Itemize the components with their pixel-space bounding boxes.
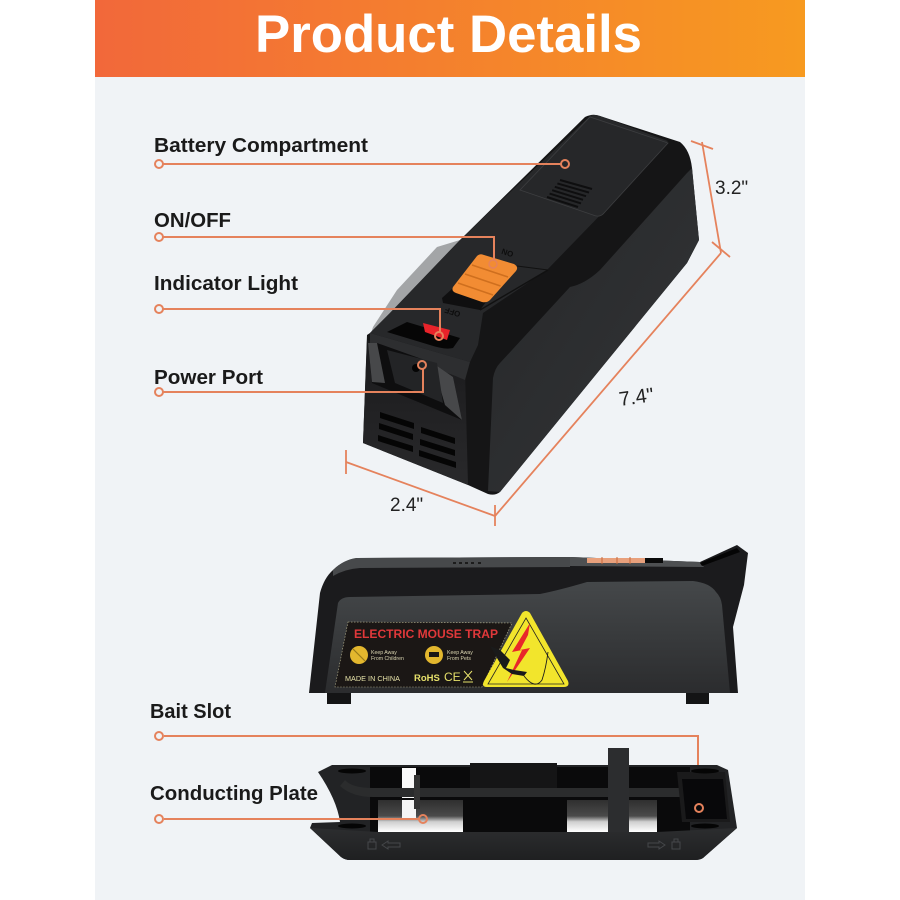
cross rail: [340, 780, 693, 797]
icon: right lock and arrow: [648, 839, 680, 849]
front recess: [368, 343, 462, 420]
lightning bolt: [507, 623, 530, 682]
rear hood: [700, 548, 740, 566]
indicator window: [387, 322, 460, 349]
background panel: [95, 0, 805, 900]
callout: Power Port: [154, 361, 426, 396]
warning triangle: [483, 611, 568, 687]
warning label: [335, 622, 512, 687]
bait slot marker: [695, 804, 703, 812]
left edge highlight: [367, 240, 460, 345]
product: trap tray view: [310, 748, 737, 860]
mouse silhouette: [490, 646, 527, 676]
tray front wall: [310, 828, 737, 860]
hood rim: [370, 333, 470, 380]
side panel: [325, 581, 730, 693]
children warning: Keep Away: [371, 650, 397, 656]
power port: [412, 364, 420, 372]
warning label: From Pets: [447, 656, 471, 662]
label: 3.2 in: 3.2": [715, 178, 748, 199]
front face: [363, 340, 468, 485]
callout: ON/OFF: ON/OFF: [154, 209, 231, 232]
header banner: [95, 0, 805, 77]
callout: Conducting Plate: Conducting Plate: [150, 782, 318, 805]
icon: keep away from children: [350, 646, 368, 664]
label heading: ELECTRIC MOUSE TRAP: [354, 629, 498, 641]
crossbar post: [608, 748, 629, 832]
bait compartment: [677, 772, 730, 822]
metal plate left: [378, 800, 463, 832]
recess pillars: [368, 343, 462, 420]
indicator light: [423, 323, 450, 340]
dimension: width 2.4 in: [346, 450, 495, 516]
warning label: CE: [444, 670, 461, 684]
front vents: [378, 412, 456, 468]
icon: left lock and arrow: [368, 839, 400, 849]
label: 7.4 in: 7.4": [618, 384, 655, 411]
metal plate upper: [402, 768, 416, 798]
certification marks: RoHS: [414, 673, 440, 684]
callout: Battery Compartment: [154, 134, 569, 168]
product: trap side view: [309, 545, 748, 704]
icon: recycling mark: [463, 671, 473, 682]
center block: [470, 763, 557, 788]
tray outline: [310, 748, 737, 860]
top surface: [370, 115, 668, 362]
callout: Indicator Light: Indicator Light: [154, 272, 298, 295]
on/off switch: [452, 254, 517, 302]
callout: Indicator Light: [154, 272, 443, 340]
switch strip orange: [587, 557, 663, 564]
lid dots: [453, 562, 481, 564]
title: Product Details: [255, 5, 642, 64]
icon: keep away from pets: [425, 646, 443, 664]
side face: [488, 168, 699, 492]
corner keyholes: [338, 768, 719, 828]
callout: Battery Compartment: Battery Compartment: [154, 134, 368, 157]
pets warning: Keep Away: [447, 650, 473, 656]
callout: Bait Slot: Bait Slot: [150, 700, 231, 723]
callout: ON/OFF: [154, 209, 497, 268]
recess block: [387, 350, 443, 403]
body silhouette: [363, 115, 699, 495]
battery cover grille: [547, 180, 592, 207]
warning label: From Children: [371, 656, 404, 662]
feet: [327, 693, 351, 704]
product: trap perspective view: [363, 115, 699, 495]
dimension: length 7.4 in: [495, 253, 721, 526]
tray interior: [370, 767, 690, 832]
on and off marks: ON: [500, 246, 515, 259]
side body: [309, 545, 748, 693]
dimension: height 3.2 in: [691, 141, 730, 257]
left plate post: [414, 775, 420, 809]
top switch strip: [570, 557, 704, 567]
callout: Bait Slot: [150, 700, 698, 804]
callout: Conducting Plate: [150, 782, 427, 823]
made in china: MADE IN CHINA: [345, 676, 400, 683]
label: 2.4 in: 2.4": [390, 495, 423, 516]
switch slot: [442, 266, 548, 310]
top strip: [333, 557, 570, 576]
callout: Power Port: Power Port: [154, 366, 263, 389]
metal plate right: [567, 800, 657, 832]
battery cover: [520, 117, 668, 216]
product: trap perspective view: OFF: [444, 305, 462, 319]
